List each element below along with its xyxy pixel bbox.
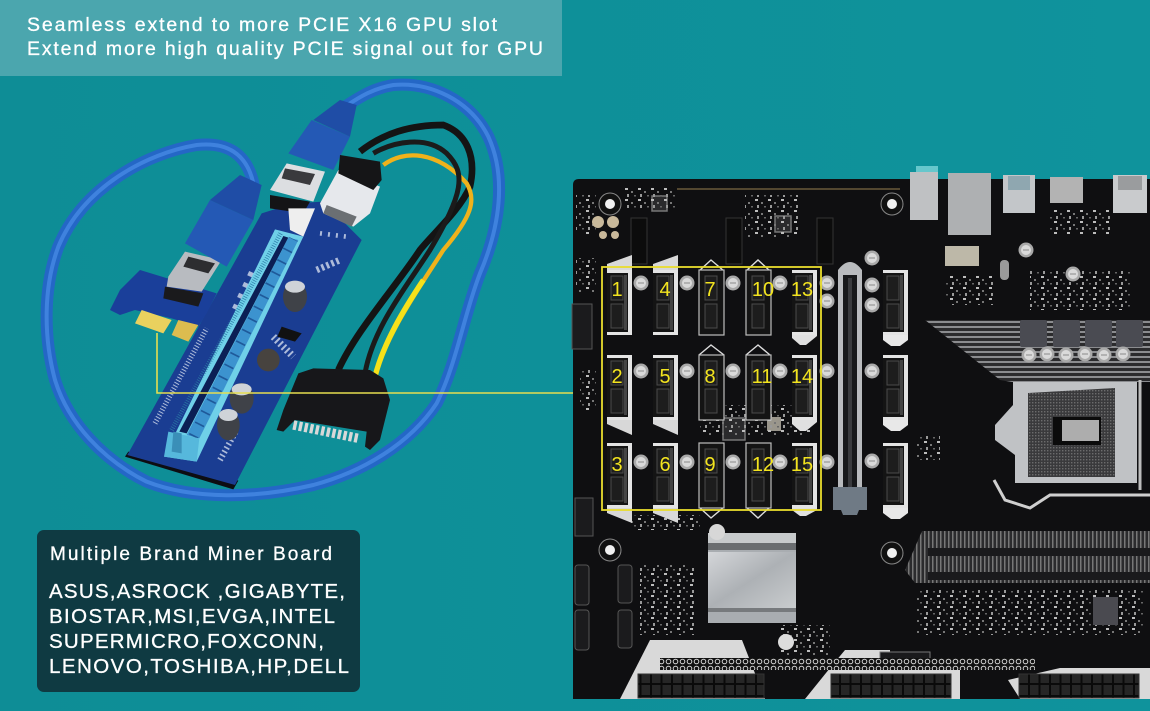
brand list: ASUS,ASROCK ,GIGABYTE, bbox=[49, 580, 345, 603]
blue USB plug upper bbox=[288, 120, 350, 170]
slot numbers: 3 bbox=[611, 454, 623, 476]
brand list bbox=[49, 580, 349, 678]
silver USB socket upper bbox=[270, 163, 325, 202]
right PCIe slots bbox=[883, 270, 908, 519]
silver USB socket lower bbox=[167, 252, 222, 292]
brand list: BIOSTAR,MSI,EVGA,INTEL bbox=[49, 605, 335, 628]
brand list: LENOVO,TOSHIBA,HP,DELL bbox=[49, 655, 349, 678]
slot numbers: 7 bbox=[704, 279, 716, 301]
VRM inductors bbox=[1020, 320, 1143, 347]
second black cable bbox=[365, 142, 459, 373]
VRM capacitors bbox=[1018, 242, 1130, 362]
slot numbers: 15 bbox=[791, 454, 813, 476]
brand list: SUPERMICRO,FOXCONN, bbox=[49, 630, 324, 653]
brand list panel bbox=[37, 530, 360, 692]
gold capacitors bbox=[592, 216, 619, 239]
RAM slots bbox=[905, 531, 1150, 625]
white power connector bbox=[320, 170, 380, 227]
gold fingers x1 bbox=[135, 310, 172, 333]
PCB bottom black edge bbox=[125, 452, 238, 489]
slot numbers: 12 bbox=[752, 454, 774, 476]
rear I/O ports bbox=[910, 166, 1147, 235]
slot numbers: 8 bbox=[704, 366, 716, 388]
left connector blocks bbox=[572, 304, 632, 650]
riser PCB bbox=[127, 202, 362, 485]
slot numbers: 9 bbox=[704, 454, 716, 476]
slot numbers: 6 bbox=[659, 454, 671, 476]
white board zones bbox=[620, 640, 1150, 699]
top banner bbox=[0, 0, 562, 76]
slot numbers: 13 bbox=[791, 279, 813, 301]
black power cables bbox=[338, 125, 472, 370]
small silver modules bbox=[945, 246, 979, 266]
banner line 2: Extend more high quality PCIE signal out for GPU bbox=[27, 38, 543, 60]
screw holes bbox=[599, 193, 621, 215]
yellow power cables bbox=[375, 155, 471, 377]
controller chips bbox=[652, 196, 791, 440]
top copper trace bbox=[677, 188, 900, 190]
white connector at slot top bbox=[288, 208, 315, 237]
motherboard bbox=[572, 166, 1150, 699]
small PCIe x1 adapter bbox=[110, 270, 217, 327]
heatsink bbox=[708, 524, 796, 650]
blue USB cable bbox=[47, 85, 499, 495]
slot numbers: 14 bbox=[791, 366, 813, 388]
CPU socket bbox=[994, 380, 1150, 508]
slot capacitors bbox=[634, 276, 834, 470]
photo: PCIe riser card with cables bbox=[47, 85, 499, 495]
gold fingers small bbox=[172, 320, 198, 342]
ATX power connectors bbox=[638, 674, 1139, 698]
banner line 1: Seamless extend to more PCIE X16 GPU slot bbox=[27, 14, 498, 36]
fan headers bbox=[631, 218, 833, 264]
board base bbox=[573, 179, 1150, 699]
slot wedges bbox=[607, 255, 678, 523]
15 PCIe slots group bbox=[607, 255, 834, 523]
PCB silkscreen marks bbox=[155, 233, 347, 460]
dotted component row bbox=[660, 658, 1035, 670]
slot numbers: 4 bbox=[659, 279, 671, 301]
blue USB plug lower bbox=[185, 200, 253, 267]
x16 PCIe slot bbox=[833, 262, 867, 515]
SMD component patches bbox=[576, 188, 1145, 655]
inductor and chip bbox=[257, 349, 280, 371]
PCIe x16 slot bbox=[164, 229, 303, 462]
SATA power connector bbox=[277, 368, 390, 450]
yellow selection box bbox=[602, 267, 821, 510]
capacitors bbox=[217, 281, 307, 440]
VRM stripes bbox=[925, 320, 1150, 382]
panel heading: Multiple Brand Miner Board bbox=[50, 544, 332, 565]
leader line from gold fingers to slots bbox=[157, 333, 602, 393]
slot numbers: 1 bbox=[611, 279, 623, 301]
capacitors right of x16 slot bbox=[820, 250, 880, 468]
slot numbers: 10 bbox=[752, 279, 774, 301]
power header bbox=[880, 652, 930, 669]
slot numbers bbox=[611, 279, 813, 476]
slot numbers: 2 bbox=[611, 366, 623, 388]
slot numbers: 5 bbox=[659, 366, 671, 388]
slot numbers: 11 bbox=[752, 366, 772, 388]
